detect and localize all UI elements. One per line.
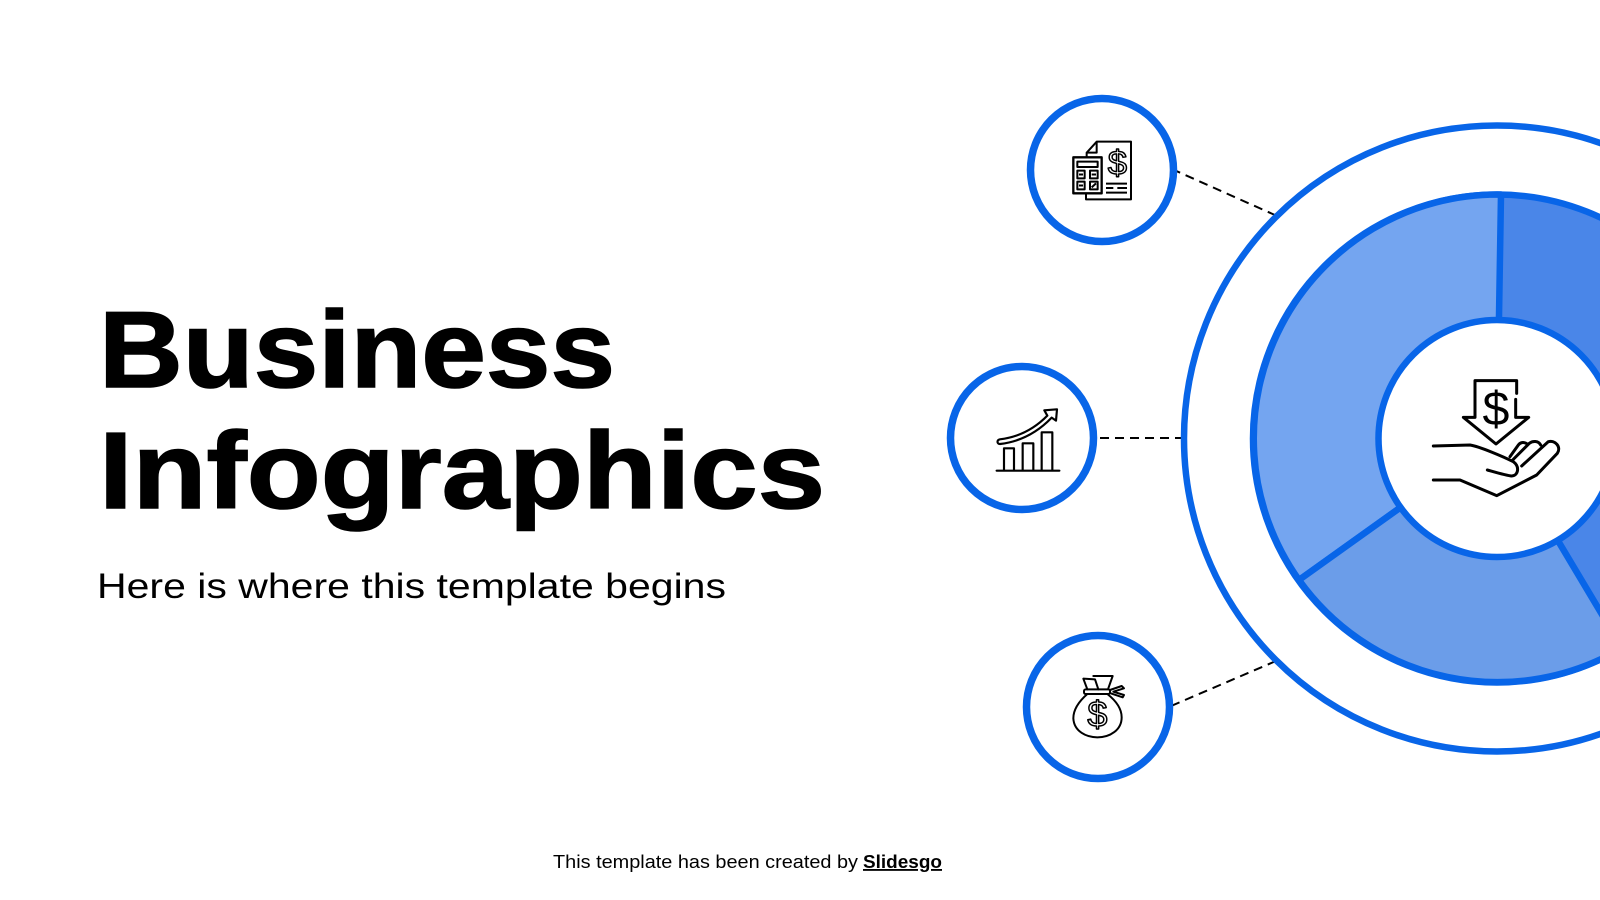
icon: calculator and invoice: $ — [1108, 145, 1127, 183]
icon: calculator and invoice — [1073, 142, 1131, 199]
footer credit: Slidesgo — [863, 851, 942, 872]
node circle — [950, 366, 1094, 510]
icon: money bag — [1073, 676, 1124, 737]
node circle — [1026, 636, 1170, 778]
icon: hand receiving dollar arrow: $ — [1483, 382, 1510, 436]
segment: left light — [1254, 194, 1501, 580]
node: money bag — [1026, 636, 1170, 778]
connector: bottom — [1171, 661, 1276, 706]
icon: growth chart — [997, 409, 1059, 471]
icon: money bag: $ — [1087, 693, 1107, 734]
segment: right dark — [1253, 194, 1600, 682]
title: Business — [99, 289, 615, 411]
connector: top — [1174, 170, 1276, 216]
icon: hand receiving dollar arrow — [1433, 381, 1559, 496]
title — [99, 289, 825, 532]
node: calculator and invoice — [1030, 98, 1174, 242]
node: growth chart — [950, 366, 1094, 510]
title: Infographics — [99, 410, 825, 532]
center circle — [1378, 320, 1600, 557]
hand — [1433, 441, 1559, 496]
donut chart — [1253, 194, 1600, 682]
segment: bottom medium — [1299, 438, 1600, 682]
subtitle: Here is where this template begins — [97, 566, 726, 606]
connector: middle — [1095, 437, 1184, 439]
node circle — [1030, 98, 1174, 242]
outer ring — [1184, 126, 1600, 752]
arrow with dollar — [1463, 381, 1529, 444]
footer credit: This template has been created by — [553, 851, 859, 872]
